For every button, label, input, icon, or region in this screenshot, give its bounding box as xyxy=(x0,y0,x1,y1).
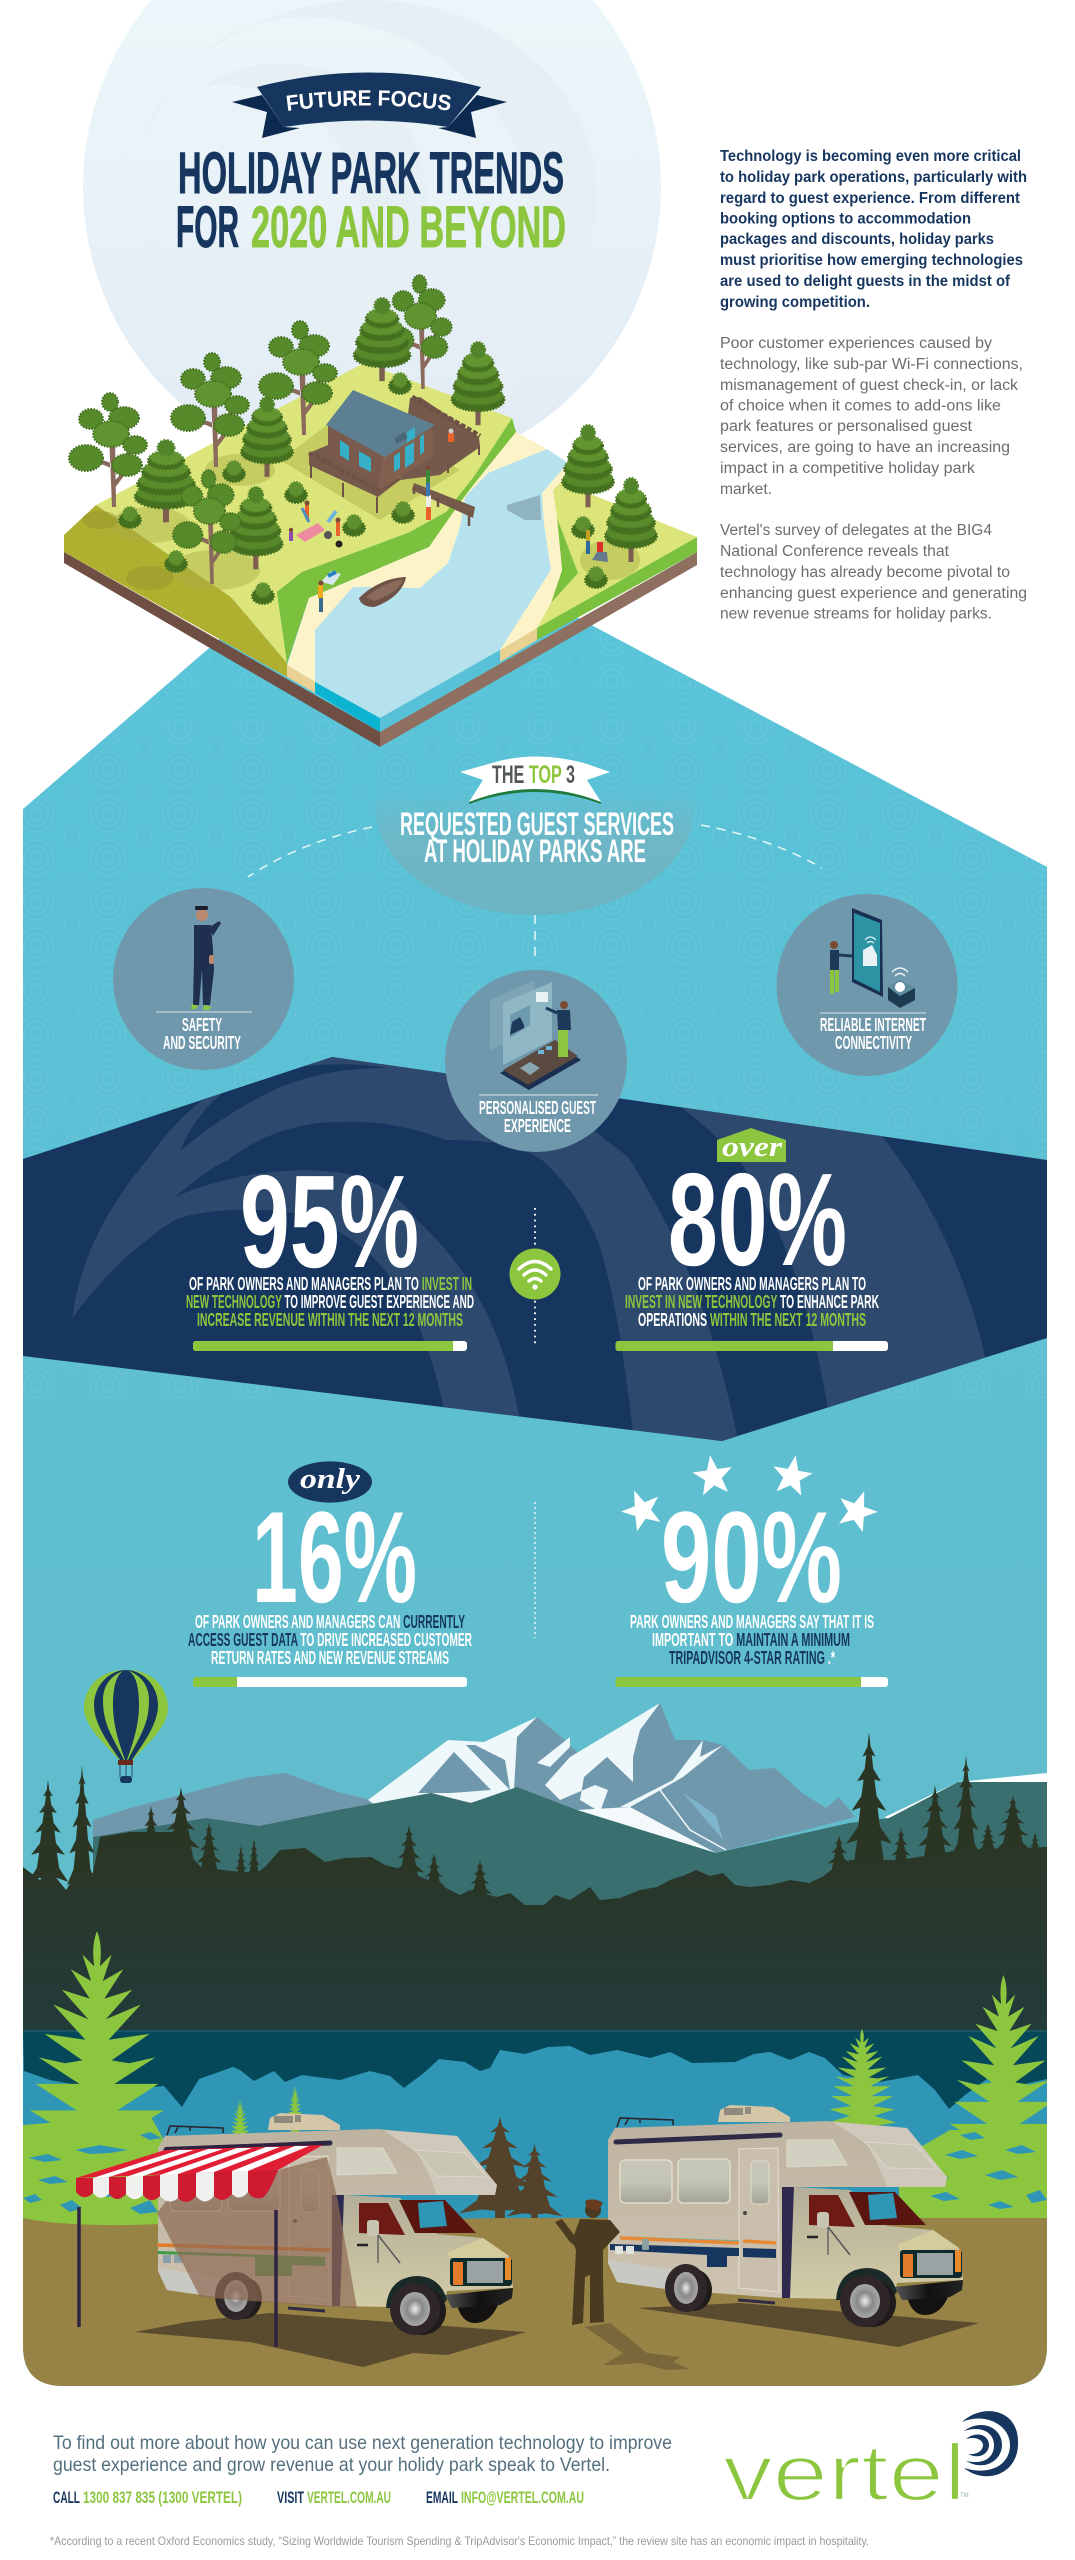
intro text: Poor customer experiences caused by xyxy=(720,335,992,352)
stripes xyxy=(610,2237,776,2267)
service circle: personalised guest experience: PERSONALISED GUEST xyxy=(479,1098,596,1118)
navy band xyxy=(23,1056,1047,1460)
intro text: of choice when it comes to add-ons like xyxy=(720,398,1001,414)
intro text: are used to delight guests in the midst of xyxy=(720,273,1011,290)
dotted divider xyxy=(534,1502,536,1638)
stat: only 16%: RETURN RATES AND NEW REVENUE STREAMS xyxy=(211,1648,449,1668)
stat: 90% with stars: IMPORTANT TO MAINTAIN A MINIMUM xyxy=(652,1630,850,1650)
lime trees xyxy=(23,1931,1062,2226)
forest xyxy=(28,1732,1043,1910)
intro text: enhancing guest experience and generating xyxy=(720,585,1027,602)
rowing boat xyxy=(359,577,406,607)
footer text: EMAIL xyxy=(426,2488,458,2507)
footer text: VISIT xyxy=(277,2488,304,2507)
foreground trees xyxy=(69,353,657,604)
service circle: safety and security xyxy=(113,888,294,1070)
badge: only xyxy=(288,1461,372,1503)
progress bar 16 xyxy=(193,1677,467,1687)
icon: phone and wifi box xyxy=(830,908,915,1008)
progress bar 80 xyxy=(616,1341,888,1351)
icon: hot air balloon xyxy=(84,1670,168,1783)
island base faces xyxy=(64,505,697,747)
title: HOLIDAY PARK TRENDS xyxy=(178,141,564,206)
ground xyxy=(23,2218,1047,2390)
tree shadows xyxy=(110,408,640,590)
stat: 90% with stars xyxy=(616,1452,888,1687)
badge: only: only xyxy=(300,1463,360,1495)
service circle: safety and security: AND SECURITY xyxy=(163,1033,241,1053)
intro text: growing competition. xyxy=(720,294,870,311)
stat: only 16% xyxy=(188,1461,472,1687)
stat: 95%: INCREASE REVENUE WITHIN THE NEXT 12 MONTHS xyxy=(197,1310,463,1330)
picnic and guests xyxy=(289,428,608,612)
badge: over xyxy=(717,1128,786,1163)
motorhome: right xyxy=(608,2105,963,2327)
intro text: new revenue streams for holiday parks. xyxy=(720,606,992,622)
stat: over 80%: 80% xyxy=(668,1146,847,1293)
stat: 90% with stars: PARK OWNERS AND MANAGERS SAY THAT IT IS xyxy=(630,1612,874,1632)
stat: 95%: OF PARK OWNERS AND MANAGERS PLAN TO INVEST IN xyxy=(189,1274,472,1294)
footer text xyxy=(53,2432,672,2507)
banner: future focus: FUTURE FOCUS xyxy=(286,90,451,111)
stat: 90% with stars: 90% xyxy=(661,1484,842,1630)
intro text: packages and discounts, holiday parks xyxy=(720,231,994,248)
brown trees xyxy=(459,2117,562,2222)
stat: only 16%: OF PARK OWNERS AND MANAGERS CAN CURRENTLY xyxy=(195,1612,465,1632)
shade on coach xyxy=(157,2157,357,2308)
logo: vertel: TM xyxy=(960,2493,969,2499)
stat: over 80%: INVEST IN NEW TECHNOLOGY TO ENHANCE PARK xyxy=(625,1292,879,1312)
heading: the top 3: REQUESTED GUEST SERVICES xyxy=(400,806,674,842)
land and river xyxy=(96,363,697,718)
intro text: booking options to accommodation xyxy=(720,210,971,228)
intro text: National Conference reveals that xyxy=(720,543,950,560)
title xyxy=(176,141,566,260)
footer text: 1300 837 835 (1300 VERTEL) xyxy=(83,2488,242,2507)
footer text: VERTEL.COM.AU xyxy=(307,2488,391,2507)
stat: over 80%: OPERATIONS WITHIN THE NEXT 12 MONTHS xyxy=(638,1310,866,1330)
stat: only 16%: 16% xyxy=(252,1484,417,1630)
service circle: personalised guest experience: EXPERIENCE xyxy=(504,1116,571,1136)
landscape xyxy=(23,1703,1062,2390)
badge: over: over xyxy=(722,1131,783,1163)
far ridge with snow xyxy=(93,1773,1047,1905)
man's shadow xyxy=(585,2323,690,2370)
intro text: park features or personalised guest xyxy=(720,418,973,435)
cabin xyxy=(309,390,480,513)
stat: 95%: 95% xyxy=(240,1148,419,1295)
logo: vertel xyxy=(723,2411,1018,2517)
panel: main teal background xyxy=(23,508,1047,2386)
service circle: reliable internet connectivity: CONNECTIVITY xyxy=(835,1033,912,1053)
stat: only 16%: ACCESS GUEST DATA TO DRIVE INCREASED CUSTOMER xyxy=(188,1630,472,1650)
stat: over 80%: OF PARK OWNERS AND MANAGERS PLAN TO xyxy=(638,1274,866,1294)
dashed connectors xyxy=(248,825,822,962)
intro text xyxy=(720,148,1027,622)
awning poles xyxy=(79,2207,276,2347)
intro text: mismanagement of guest check-in, or lack xyxy=(720,377,1018,394)
intro text: market. xyxy=(720,481,772,498)
stat: 90% with stars: TRIPADVISOR 4-STAR RATING .* xyxy=(669,1648,835,1668)
intro text: technology, like sub-par Wi-Fi connections, xyxy=(720,356,1023,373)
trees behind cabin xyxy=(259,275,505,435)
service circle: safety and security: SAFETY xyxy=(182,1015,222,1035)
stripes xyxy=(157,2245,330,2276)
awning xyxy=(76,2143,328,2202)
figure: man waving xyxy=(555,2199,620,2325)
title: FOR xyxy=(176,195,239,260)
heading: the top 3: AT HOLIDAY PARKS ARE xyxy=(424,833,646,869)
island illustration xyxy=(64,275,697,747)
footer text: guest experience and grow revenue at your holidy park speak to Vertel. xyxy=(53,2454,610,2476)
intro text: to holiday park operations, particularly with xyxy=(720,169,1027,186)
motorhome: left with awning xyxy=(76,2113,513,2347)
lime tree gaps xyxy=(23,2132,1047,2214)
title: 2020 AND BEYOND xyxy=(251,195,566,260)
progress bar 90 xyxy=(616,1677,888,1687)
service circle: reliable internet connectivity: RELIABLE INTERNET xyxy=(820,1015,926,1035)
icon: touch screen and person xyxy=(490,980,581,1090)
heading: the top 3 xyxy=(248,695,822,962)
intro text: regard to guest experience. From different xyxy=(720,190,1020,207)
footer text: To find out more about how you can use next generation technology to improve xyxy=(53,2432,672,2454)
stat: 95%: NEW TECHNOLOGY TO IMPROVE GUEST EXPERIENCE AND xyxy=(186,1292,474,1312)
intro text: must prioritise how emerging technologies xyxy=(720,252,1023,269)
lake with reflection xyxy=(23,2031,1047,2231)
footnote: *According to a recent Oxford Economics study, “Sizing Worldwide Tourism Spending & TripAdvisor's Economic Impact,” the review site has an economic impact in hospitality. xyxy=(50,2534,869,2548)
divider: wifi icon xyxy=(510,1208,560,1345)
intro text: impact in a competitive holiday park xyxy=(720,460,975,477)
intro text: services, are going to have an increasing xyxy=(720,439,1010,456)
intro text: technology has already become pivotal to xyxy=(720,564,1010,581)
intro text: Technology is becoming even more critical xyxy=(720,148,1021,165)
mountains xyxy=(93,1703,855,1853)
progress bar 95 xyxy=(193,1341,467,1351)
banner: future focus xyxy=(232,72,507,138)
icon: security guard xyxy=(191,906,221,1010)
service circle: personalised guest experience xyxy=(445,970,627,1152)
service circle: reliable internet connectivity xyxy=(776,894,958,1076)
stat: over 80% xyxy=(616,1128,888,1351)
background swirl circle xyxy=(83,0,661,476)
stat: 95% xyxy=(186,1148,474,1351)
footer text: INFO@VERTEL.COM.AU xyxy=(461,2488,584,2507)
ribbon: THE TOP 3 xyxy=(492,761,575,789)
logo: vertel: vertel xyxy=(723,2428,966,2517)
icon: four stars xyxy=(616,1452,883,1535)
intro text: Vertel's survey of delegates at the BIG4 xyxy=(720,522,992,539)
ribbon xyxy=(460,756,610,804)
jetty xyxy=(412,483,475,526)
footer text: CALL xyxy=(53,2488,80,2507)
ground shadows xyxy=(80,2303,979,2367)
